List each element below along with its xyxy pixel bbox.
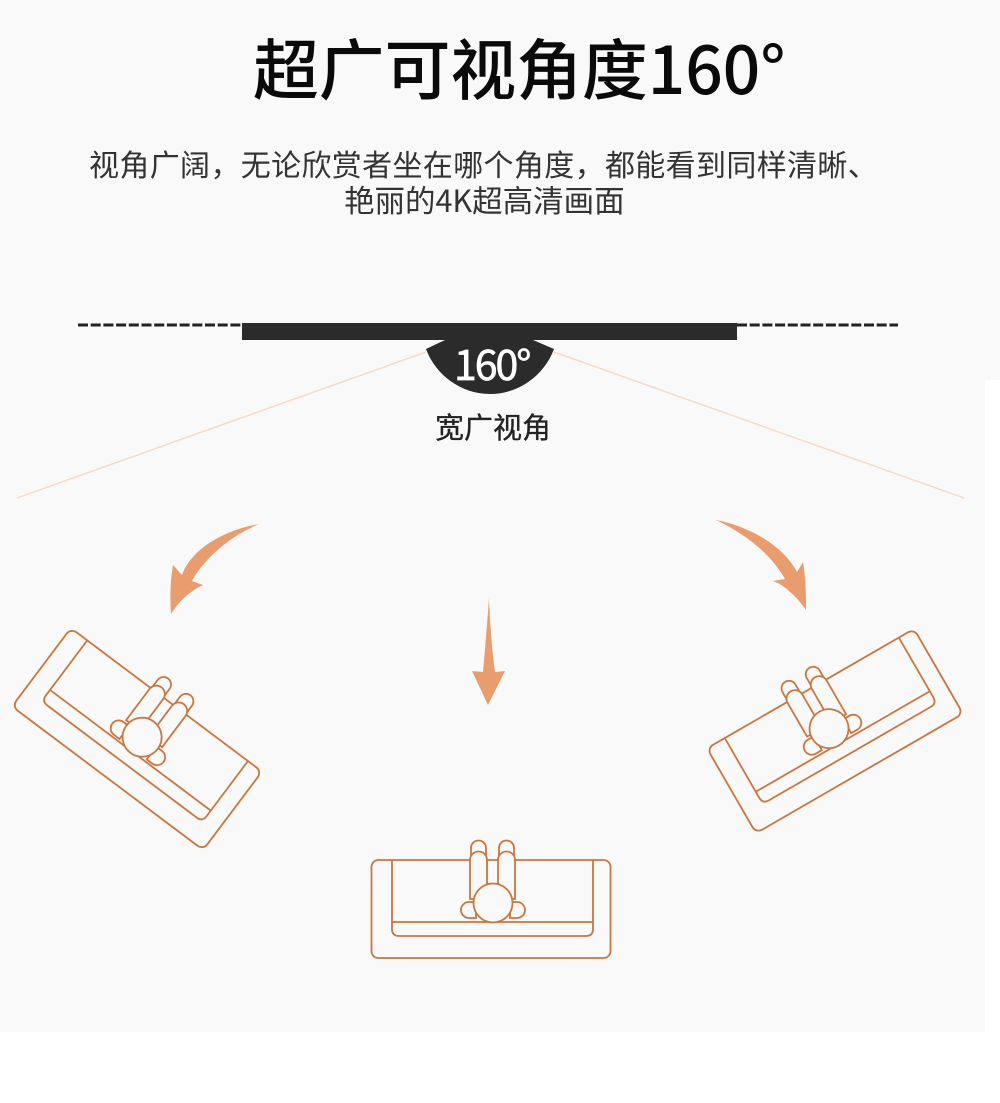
viewing angle lines [17, 352, 964, 498]
sofa: left [12, 614, 273, 850]
arrow: right [716, 520, 806, 610]
person: left [105, 668, 205, 772]
160 degree badge: 160° [454, 332, 530, 392]
arrow: centre [472, 598, 505, 705]
subtitle text block [89, 141, 878, 221]
screen with dashed extension lines [78, 323, 898, 340]
subtitle text block: 视角广阔，无论欣赏者坐在哪个角度，都能看到同样清晰、 [89, 141, 878, 185]
sofa: right [698, 613, 963, 833]
title: 超广可视角度160° [253, 18, 786, 113]
wide angle label: 宽广视角 [435, 405, 551, 447]
sofa: centre [372, 840, 610, 958]
160 degree badge [426, 332, 554, 394]
subtitle text block: 艳丽的4K超高清画面 [344, 177, 625, 221]
person: right [770, 659, 866, 762]
arrow: left [170, 524, 259, 614]
person: centre [461, 840, 525, 922]
